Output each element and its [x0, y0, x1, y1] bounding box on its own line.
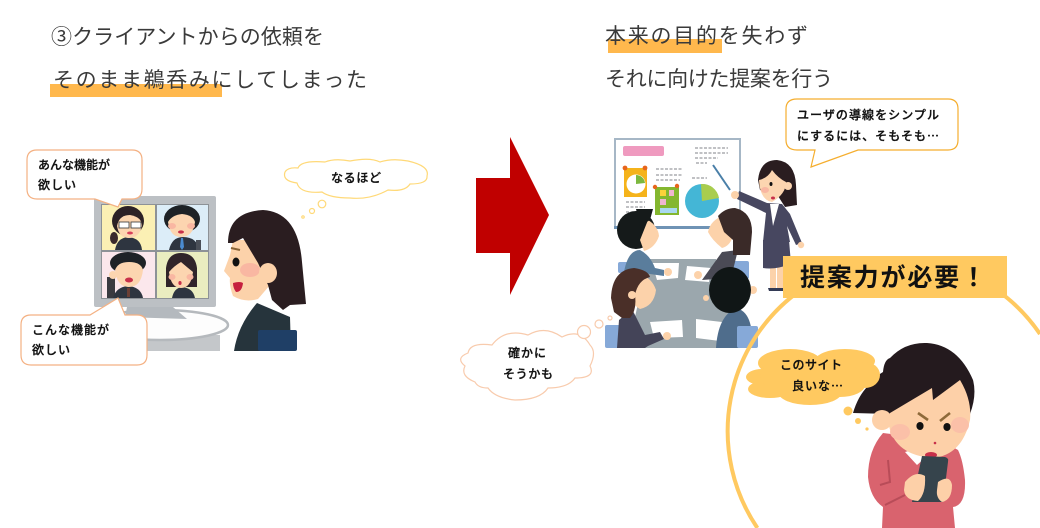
heading: left problem statement: [50, 26, 367, 97]
presentation board: [614, 139, 741, 229]
thought cloud: tashika ni: 確かに: [508, 345, 546, 360]
callout: lower client request: こんな機能が: [32, 322, 109, 337]
heading banner: 提案力が必要！: [800, 263, 986, 292]
attendee: top left: [617, 209, 672, 276]
person: woman with smartphone: [853, 343, 974, 528]
spotlight circle: [728, 259, 1040, 528]
attendee: bottom left: [605, 268, 671, 348]
person: woman watching screen: [224, 210, 306, 351]
callout: presenter speech: にするには、そもそも…: [797, 127, 939, 144]
heading: right solution statement: [605, 25, 833, 91]
callout: presenter speech: ユーザの導線をシンプル: [797, 107, 939, 122]
thought cloud: naruhodo: [284, 159, 427, 218]
monitor: [94, 196, 216, 319]
person: glasses woman: [110, 206, 144, 250]
thought cloud: tashika ni: [461, 316, 612, 400]
person: woman with bob: [166, 253, 197, 298]
heading: right solution statement: それに向けた提案を行う: [605, 68, 833, 91]
heading banner: [783, 256, 1007, 298]
thought cloud: tashika ni: そうかも: [503, 367, 553, 381]
thought cloud: naruhodo: なるほど: [331, 171, 381, 185]
heading: left problem statement: ③クライアントからの依頼を: [51, 26, 324, 49]
callout: presenter speech: [786, 99, 958, 167]
thought cloud: kono saito: 良いな…: [792, 377, 843, 394]
person: laughing man: [107, 252, 146, 298]
callout: lower client request: [21, 298, 147, 365]
callout: lower client request: 欲しい: [32, 342, 70, 357]
thought cloud: kono saito: [746, 349, 880, 431]
callout: upper client request: 欲しい: [38, 177, 76, 192]
attendee: top right: [694, 208, 752, 280]
heading: left problem statement: そのまま鵜呑みにしてしまった: [53, 69, 367, 92]
desk: [92, 310, 228, 351]
person: man in blue tie: [164, 205, 201, 250]
callout: upper client request: あんな機能が: [38, 157, 110, 172]
illustration: online meeting: [92, 196, 306, 351]
attendee: bottom right: [703, 267, 758, 348]
thought cloud: kono saito: このサイト: [780, 358, 842, 372]
meeting table: [628, 259, 738, 348]
presenter: [731, 160, 804, 291]
callout: upper client request: [27, 150, 142, 207]
heading: right solution statement: 本来の目的を失わず: [605, 25, 808, 48]
arrow: [476, 137, 549, 295]
illustration: meeting room: [605, 139, 804, 348]
